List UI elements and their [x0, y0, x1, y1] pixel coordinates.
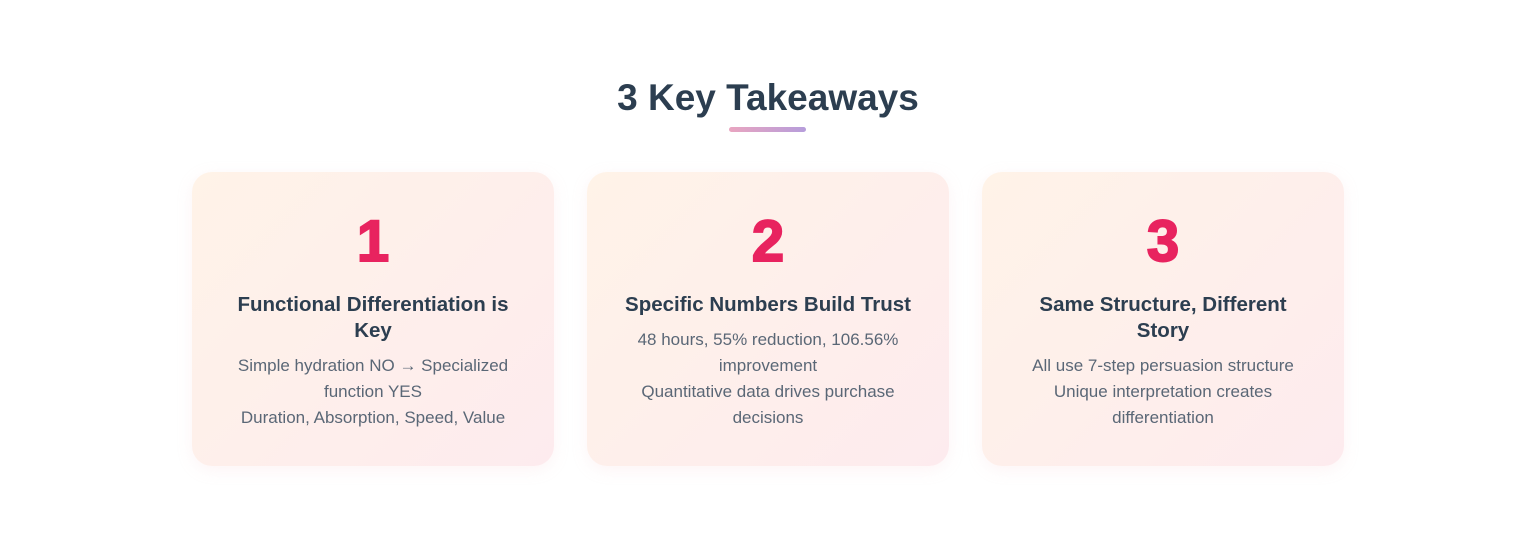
heading 3: Same Structure, Different Story [1039, 293, 1287, 342]
text 3 [1032, 356, 1294, 427]
number 3: 3 [1147, 209, 1179, 274]
heading 1: Functional Differentiation is Key [237, 293, 509, 342]
text 2: 48 hours, 55% reduction, 106.56% improvement [638, 330, 898, 375]
panel: takeaway 1 [192, 172, 554, 466]
text 1 [238, 356, 508, 427]
title underline [729, 127, 806, 132]
text 2 [638, 330, 898, 427]
panel: takeaway 2 [587, 172, 949, 466]
text 3: All use 7-step persuasion structure [1032, 356, 1294, 375]
text 1: Duration, Absorption, Speed, Value [241, 408, 505, 427]
text 2: Quantitative data drives purchase decisions [641, 382, 895, 427]
panel: takeaway 3 [982, 172, 1344, 466]
heading 2: Specific Numbers Build Trust [625, 293, 911, 316]
number 2: 2 [752, 209, 784, 274]
text 1: Simple hydration NO → Specialized function YES [238, 356, 508, 401]
text 3: Unique interpretation creates differentiation [1054, 382, 1272, 427]
number 1: 1 [357, 209, 389, 274]
title: 3 Key Takeaways [617, 77, 919, 118]
